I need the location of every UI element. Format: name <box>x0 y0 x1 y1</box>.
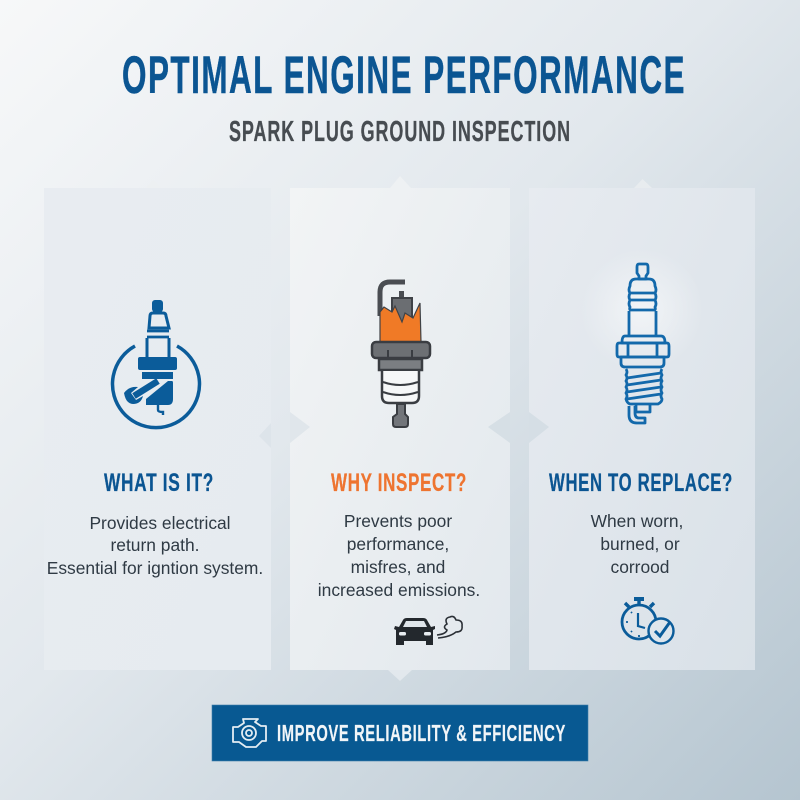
panel: why inspect <box>290 176 510 681</box>
text: why inspect: performance, <box>347 534 449 554</box>
heading: what is it: WHAT IS IT? <box>104 469 214 497</box>
icon: stopwatch with check <box>622 597 674 644</box>
text: why inspect: misfres, and <box>351 557 445 577</box>
text: what is it <box>47 513 263 578</box>
subtitle: SPARK PLUG GROUND INSPECTION <box>229 116 571 148</box>
text: when to replace: burned, or <box>600 534 680 554</box>
banner <box>212 705 588 761</box>
text: why inspect <box>318 511 480 600</box>
icon: burnt spark plug <box>372 282 430 427</box>
icon: spark plug with wrench <box>112 300 200 428</box>
text: when to replace: When worn, <box>591 511 683 531</box>
banner text: IMPROVE RELIABILITY & EFFICIENCY <box>277 720 566 746</box>
icon: car with exhaust <box>394 616 462 645</box>
panel: what is it <box>44 180 271 670</box>
text: why inspect: Prevents poor <box>344 511 452 531</box>
text: when to replace <box>591 511 683 577</box>
icon: engine <box>233 719 266 747</box>
icon: new spark plug <box>617 264 669 423</box>
panel: when to replace <box>529 179 755 670</box>
text: what is it: return path. <box>111 535 199 555</box>
text: what is it: Essential for igntion system. <box>47 558 263 578</box>
text: why inspect: increased emissions. <box>318 580 480 600</box>
text: what is it: Provides electrical <box>89 513 231 533</box>
text: when to replace: corrood <box>611 557 669 577</box>
heading: why inspect: WHY INSPECT? <box>331 469 467 497</box>
